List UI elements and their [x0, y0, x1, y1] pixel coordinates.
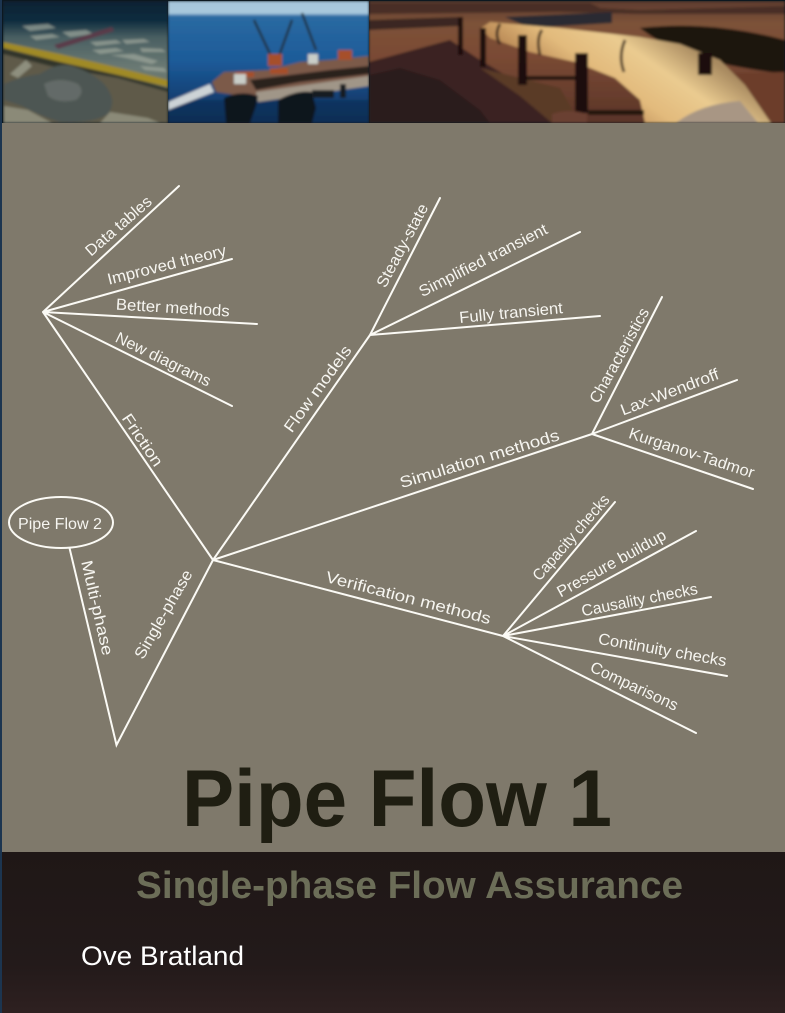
label: Data tables: Data tables: [83, 193, 156, 260]
label: Continuity checks: Continuity checks: [597, 631, 728, 670]
label: Lax-Wendroff: Lax-Wendroff: [618, 366, 722, 419]
branch: flow models: [213, 198, 600, 560]
label: Pipe Flow 2: Pipe Flow 2: [18, 516, 102, 533]
branch: verification methods: [213, 502, 727, 733]
label: Single-phase: Single-phase: [132, 567, 197, 662]
label: Kurganov-Tadmor: Kurganov-Tadmor: [626, 425, 757, 482]
label: Multi-phase: Multi-phase: [77, 559, 116, 657]
photo: offshore lay barge: [168, 1, 369, 123]
label: Characteristics: Characteristics: [587, 305, 653, 406]
branch: simulation methods: [213, 297, 753, 560]
label: Capacity checks: Capacity checks: [530, 492, 613, 584]
label: Causality checks: Causality checks: [580, 581, 699, 620]
label: Flow models: Flow models: [281, 343, 356, 436]
label: Fully transient: Fully transient: [458, 300, 564, 327]
tree diagram: [9, 186, 753, 745]
author: Ove Bratland: [81, 941, 244, 971]
label: Comparisons: Comparisons: [587, 659, 681, 715]
label: Steady-state: Steady-state: [374, 201, 432, 290]
label: Friction: Friction: [118, 411, 166, 470]
label: Simulation methods: Simulation methods: [398, 427, 562, 492]
subtitle: Single-phase Flow Assurance: [136, 865, 683, 907]
left edge line: [0, 0, 2, 1013]
label: Improved theory: Improved theory: [106, 243, 228, 289]
label: Verification methods: Verification methods: [324, 569, 493, 628]
node: Pipe Flow 2 ellipse: [9, 497, 113, 548]
branch: friction: [43, 186, 257, 560]
branch: single-phase and multi-phase: [70, 548, 213, 745]
label: Simplified transient: Simplified transient: [416, 221, 551, 301]
footer band: [0, 852, 785, 1013]
photo strip: [0, 0, 785, 123]
photo: overland pipeline: [369, 1, 785, 123]
photo: subsea pipeline: [3, 1, 168, 123]
label: Better methods: Better methods: [115, 297, 230, 320]
label: Pressure buildup: Pressure buildup: [554, 527, 669, 601]
tree labels: [18, 193, 757, 715]
title: Pipe Flow 1: [182, 754, 612, 844]
label: New diagrams: New diagrams: [113, 330, 213, 390]
